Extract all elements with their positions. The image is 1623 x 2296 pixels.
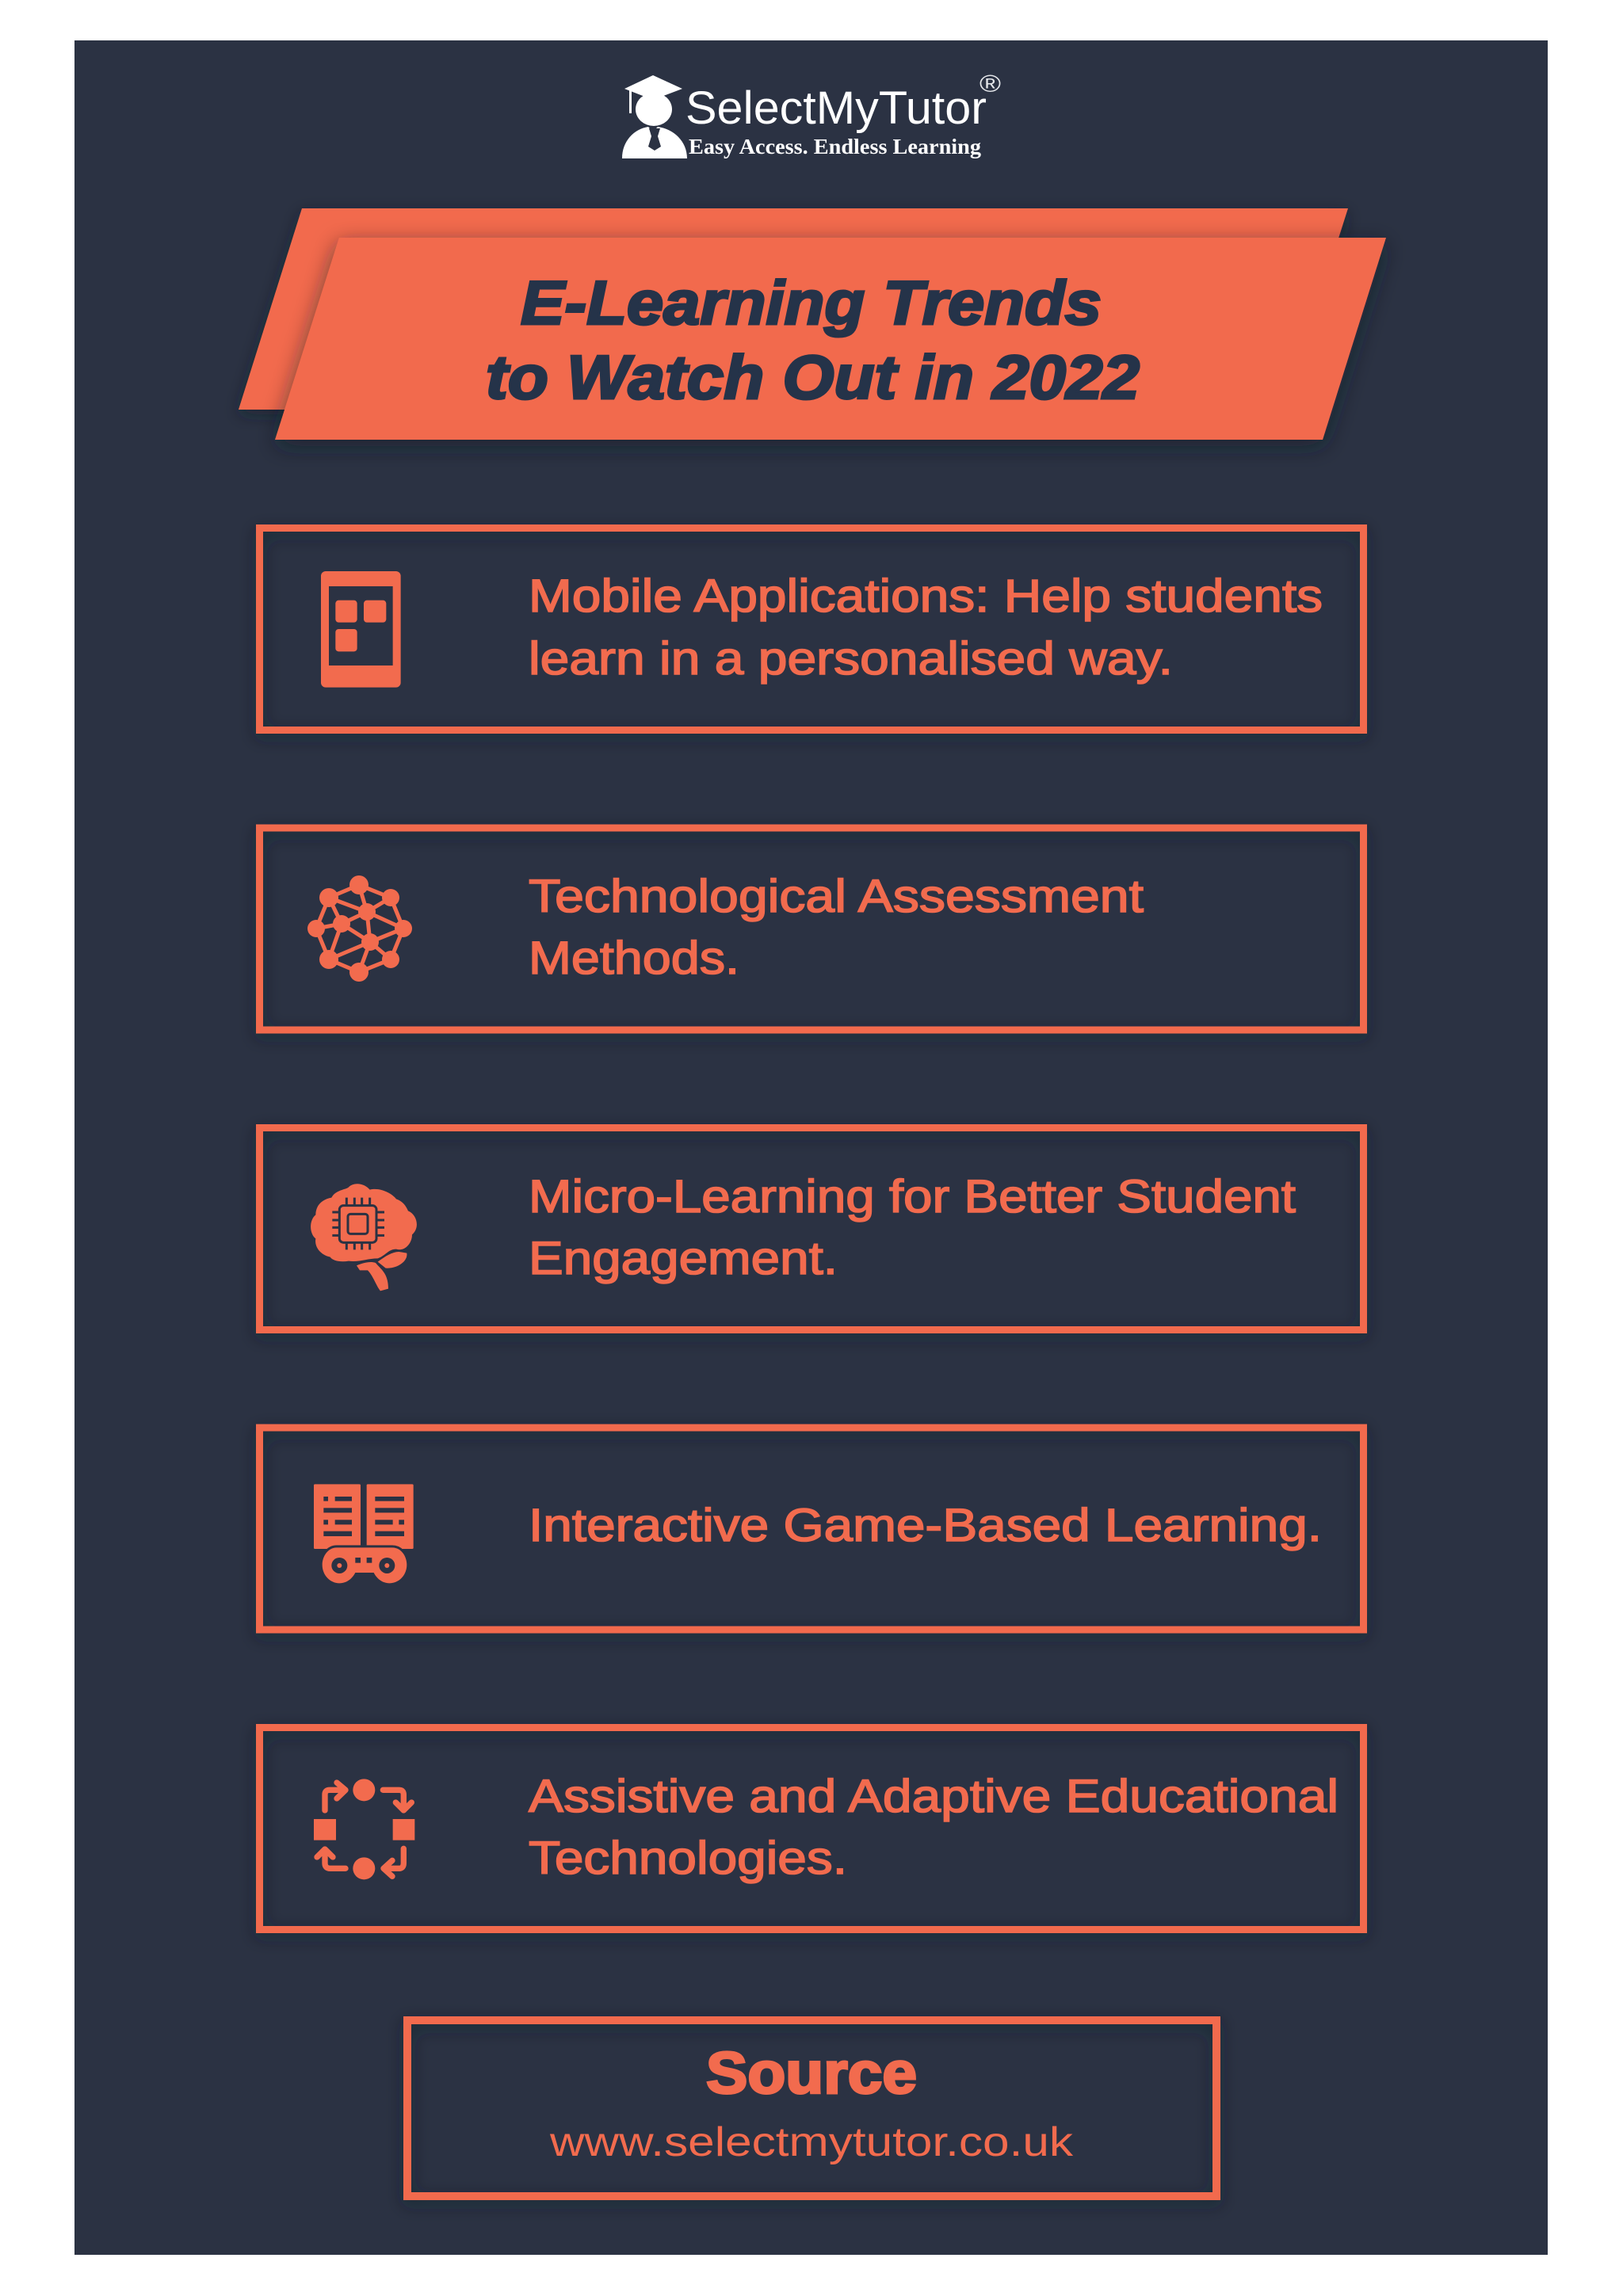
- logo tagline: Easy Access. Endless Learning: [689, 135, 982, 158]
- card 1 text: learn in a personalised way.: [529, 633, 1173, 685]
- title banner: [239, 208, 1386, 440]
- card 4 text: Interactive Game-Based Learning.: [529, 1500, 1322, 1551]
- logo wordmark: SelectMyTutor: [685, 82, 987, 134]
- card 3 text: Micro-Learning for Better Student: [529, 1171, 1296, 1222]
- icon: network: [307, 875, 412, 982]
- source box: [407, 2020, 1216, 2196]
- title text: E-Learning Trends: [521, 268, 1102, 338]
- card 5: assistive and adaptive: [260, 1727, 1363, 1930]
- title text: to Watch Out in 2022: [486, 342, 1140, 412]
- card 3 text: [529, 1171, 1296, 1284]
- logo: SelectMyTutor: [622, 70, 1001, 158]
- banner front layer: [275, 238, 1386, 440]
- icon: mobile app: [321, 571, 401, 688]
- card 1 text: Mobile Applications: Help students: [529, 570, 1323, 622]
- card 1 text: [529, 570, 1323, 685]
- card 2 text: Methods.: [529, 933, 739, 984]
- source heading: Source: [706, 2040, 917, 2106]
- card 2 text: [529, 871, 1144, 984]
- card 3: micro-learning: [260, 1128, 1363, 1329]
- title text: [486, 268, 1140, 412]
- banner back layer: [239, 208, 1348, 410]
- icon: book and game controller: [314, 1484, 414, 1583]
- card 4: game-based learning: [260, 1428, 1363, 1630]
- icon: brain with chip: [311, 1184, 417, 1291]
- card 3 text: Engagement.: [529, 1233, 838, 1284]
- card 2: technological assessment: [260, 828, 1363, 1030]
- card 1: mobile applications: [260, 528, 1363, 730]
- registered mark: ®: [980, 70, 1001, 97]
- card 5 text: [529, 1771, 1338, 1884]
- card 5 text: Technologies.: [529, 1833, 847, 1884]
- icon: adaptive cycle: [314, 1779, 414, 1879]
- source url: www.selectmytutor.co.uk: [549, 2119, 1074, 2165]
- card 2 text: Technological Assessment: [529, 871, 1144, 922]
- icon: tutor with mortarboard: [622, 75, 687, 158]
- card 5 text: Assistive and Adaptive Educational: [529, 1771, 1338, 1822]
